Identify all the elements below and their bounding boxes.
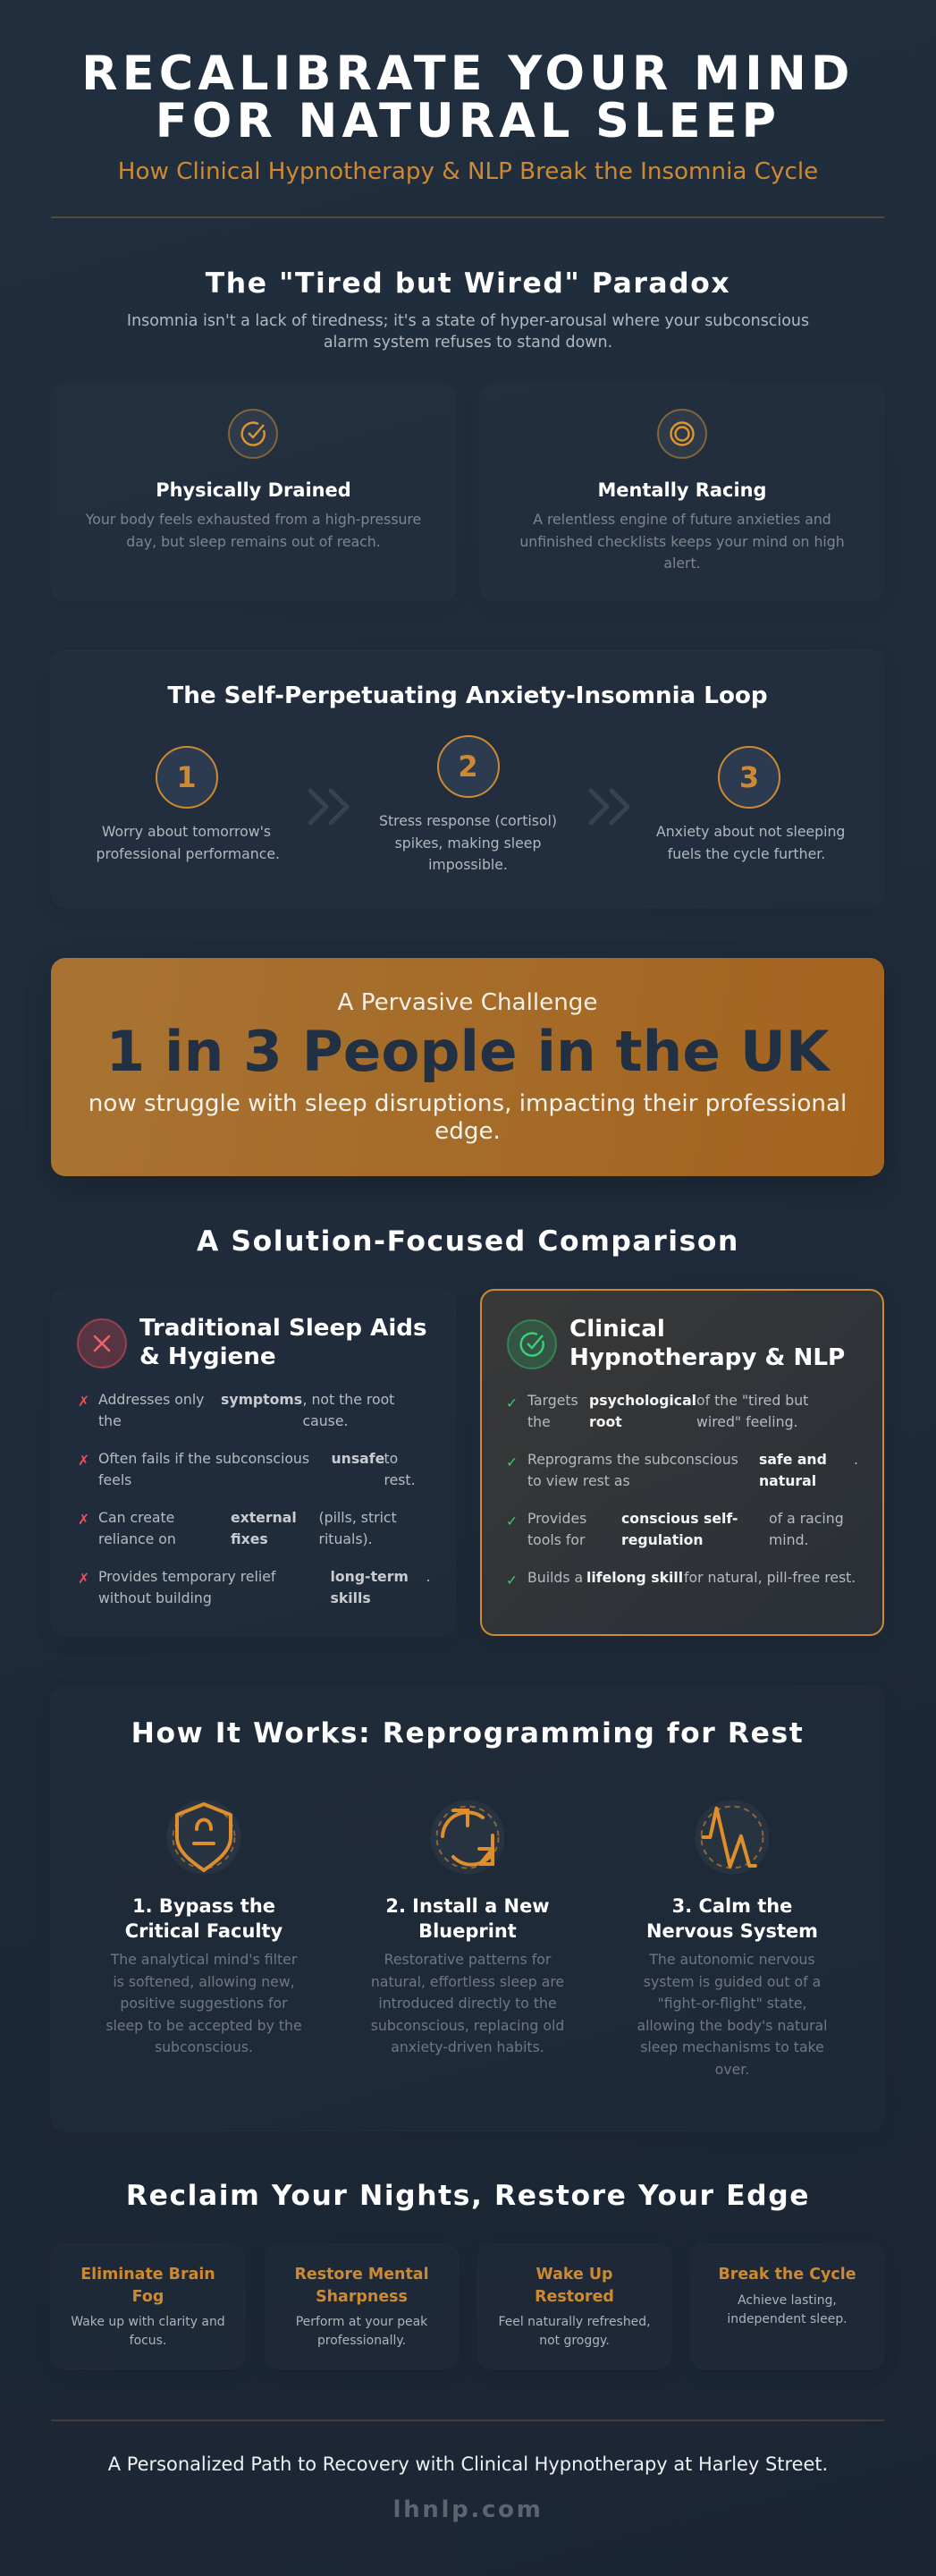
list item 4: Builds a: [527, 1569, 583, 1586]
list item 1: cause.: [302, 1412, 349, 1429]
benefit text: Wake up with clarity and: [71, 2315, 225, 2329]
list item 4: skills: [331, 1589, 371, 1606]
step 1 text: Worry about tomorrow's: [102, 823, 271, 840]
card text: Your body feels exhausted from a high-pressure: [86, 511, 421, 528]
list item 1: of the "tired but: [696, 1392, 808, 1409]
title: [81, 47, 855, 148]
step title: 1. Bypass the: [132, 1895, 275, 1917]
card title: Mentally Racing: [597, 479, 767, 501]
list item 3: tools for: [527, 1531, 585, 1548]
step text: Restorative patterns for: [384, 1951, 551, 1968]
benefit text: [691, 2292, 883, 2329]
list item 3: (pills, strict: [318, 1509, 397, 1526]
step title: [385, 1895, 550, 1942]
step title: 2. Install a New: [385, 1895, 550, 1917]
step text: [371, 1951, 564, 2055]
list item 2: [78, 1450, 416, 1488]
comparison title: [139, 1315, 427, 1370]
list item 2: rest.: [384, 1471, 416, 1488]
list item 2: ✓: [506, 1453, 518, 1470]
step 3: [656, 746, 845, 862]
benefit title: [478, 2264, 670, 2308]
list item 1: Targets: [527, 1392, 578, 1409]
list item 3: rituals).: [318, 1530, 373, 1547]
step title: [646, 1895, 818, 1942]
list item 2: feels: [98, 1471, 131, 1488]
list item 1: [506, 1392, 808, 1430]
card text: [86, 511, 421, 550]
step number 1: 1: [176, 760, 197, 794]
banner label: A Pervasive Challenge: [338, 989, 597, 1016]
benefit text: [266, 2313, 458, 2351]
step title: Nervous System: [646, 1920, 818, 1942]
comparison title: Traditional Sleep Aids: [139, 1315, 427, 1342]
list item 4: ✓: [506, 1572, 518, 1589]
benefit text: professionally.: [317, 2334, 406, 2348]
step text: is softened, allowing new,: [113, 1973, 295, 1989]
step 3 text: [656, 823, 845, 862]
banner text: [89, 1089, 847, 1145]
benefit title: Restore Mental: [294, 2266, 429, 2284]
benefit title: Sharpness: [316, 2288, 408, 2306]
title: FOR NATURAL SLEEP: [156, 94, 780, 148]
step text: [637, 1951, 828, 2077]
step 2 text: impossible.: [428, 856, 508, 873]
title: RECALIBRATE YOUR MIND: [81, 47, 855, 101]
benefit title: Wake Up: [535, 2266, 613, 2284]
list item 1: Addresses only: [98, 1391, 204, 1408]
intro text: [127, 311, 809, 352]
step text: system is guided out of a: [644, 1973, 821, 1989]
list item 3: reliance on: [98, 1530, 176, 1547]
panel: benefit break cycle: [690, 2243, 884, 2369]
list item 2: Reprograms the subconscious: [527, 1451, 738, 1468]
list item 1: the: [98, 1412, 122, 1429]
list item 4: .: [426, 1568, 431, 1585]
footer text: A Personalized Path to Recovery with Clinical Hypnotherapy at Harley Street.: [108, 2453, 828, 2475]
panel: mentally racing: [480, 384, 884, 601]
list item 4: [506, 1569, 856, 1589]
step: calm: [637, 1800, 828, 2077]
step 2 text: Stress response (cortisol): [379, 812, 557, 829]
list item 4: long-term: [331, 1568, 409, 1585]
panel: how it works: [51, 1686, 884, 2131]
loop heading: The Self-Perpetuating Anxiety-Insomnia Loop: [167, 682, 768, 708]
comparison title: Clinical: [569, 1316, 665, 1343]
benefit text: not groggy.: [539, 2334, 610, 2348]
heading: how it works: How It Works: Reprogramming for Rest: [131, 1717, 804, 1750]
icon: shield: [167, 1800, 240, 1875]
intro text: alarm system refuses to stand down.: [324, 334, 612, 352]
list item 1: psychological: [589, 1392, 696, 1409]
comparison title: Hypnotherapy & NLP: [569, 1344, 845, 1371]
card text: alert.: [663, 555, 701, 572]
benefit title: Restored: [535, 2288, 614, 2306]
card text: A relentless engine of future anxieties and: [533, 511, 831, 528]
step number 3: [718, 746, 780, 809]
list item 4: lifelong skill: [586, 1569, 683, 1586]
list item 2: safe and: [759, 1451, 827, 1468]
step: bypass: [105, 1800, 302, 2055]
panel: anxiety-insomnia loop: [51, 650, 884, 908]
step number 2: 2: [458, 750, 478, 784]
list item 3: fixes: [231, 1530, 268, 1547]
step title: [125, 1895, 282, 1942]
step 1: [97, 746, 280, 862]
step title: Critical Faculty: [125, 1920, 282, 1942]
panel: benefit brain fog: [51, 2243, 245, 2369]
list item 3: mind.: [769, 1531, 809, 1548]
panel: clinical hypnotherapy: [480, 1289, 884, 1636]
benefit text: [52, 2313, 244, 2351]
benefit title: [266, 2264, 458, 2308]
step: install: [371, 1800, 564, 2055]
step text: anxiety-driven habits.: [391, 2038, 544, 2055]
card text: day, but sleep remains out of reach.: [126, 533, 381, 550]
list item 4: ✗: [78, 1570, 89, 1587]
step text: sleep to be accepted by the: [105, 2016, 302, 2034]
list item 2: unsafe: [331, 1450, 384, 1467]
step 3 text: fuels the cycle further.: [668, 845, 825, 862]
list item 1: the: [527, 1413, 551, 1430]
panel: physically drained: [51, 384, 456, 601]
card title: Physically Drained: [156, 479, 351, 501]
list item 2: ✗: [78, 1452, 89, 1469]
intro text: Insomnia isn't a lack of tiredness; it's a state of hyper-arousal where your subconscious: [127, 311, 809, 329]
arrow 2: [588, 789, 629, 825]
benefit text: Perform at your peak: [296, 2315, 427, 2329]
heading: comparison: A Solution-Focused Comparison: [197, 1225, 739, 1258]
list item 1: , not the root: [302, 1391, 394, 1408]
banner text: edge.: [434, 1118, 501, 1145]
step 1 text: [97, 823, 280, 862]
panel: traditional sleep aids: [51, 1289, 456, 1636]
benefit text: focus.: [130, 2334, 166, 2348]
panel: benefit wake up: [477, 2243, 671, 2369]
statistic: 1 in 3 People in the UK: [105, 1019, 830, 1084]
list item 4: [78, 1568, 431, 1606]
step 1 text: professional performance.: [97, 845, 280, 862]
footer brand: lhnlp.com: [393, 2496, 543, 2523]
list item 1: symptoms: [221, 1391, 302, 1408]
step number 3: 3: [739, 760, 759, 794]
step text: sleep mechanisms to take: [640, 2038, 824, 2055]
step text: natural, effortless sleep are: [371, 1973, 564, 1989]
panel: benefit sharpness: [265, 2243, 459, 2369]
list item 2: .: [854, 1451, 858, 1468]
step text: subconscious.: [155, 2038, 253, 2055]
icon: concentric rings: [657, 409, 707, 459]
list item 2: to: [384, 1450, 398, 1467]
banner text: now struggle with sleep disruptions, impacting their professional: [89, 1089, 847, 1116]
comparison title: & Hygiene: [139, 1343, 276, 1370]
list item 3: of a racing: [769, 1510, 844, 1527]
step number 1: [156, 746, 218, 809]
list item 2: to view rest as: [527, 1472, 630, 1489]
step text: over.: [715, 2061, 749, 2077]
subtitle: How Clinical Hypnotherapy & NLP Break the Insomnia Cycle: [118, 157, 818, 184]
step text: positive suggestions for: [120, 1995, 288, 2012]
arrow 1: [308, 789, 349, 825]
list item 3: ✗: [78, 1511, 89, 1528]
list item 2: [506, 1451, 858, 1489]
step 2: [379, 735, 557, 873]
step text: [105, 1951, 302, 2055]
list item 4: for natural, pill-free rest.: [684, 1569, 856, 1586]
benefit title: Eliminate Brain: [80, 2266, 215, 2284]
list item 3: ✓: [506, 1513, 518, 1530]
list item 3: conscious self-: [621, 1510, 738, 1527]
step title: Blueprint: [418, 1920, 517, 1942]
benefit text: independent sleep.: [727, 2312, 847, 2326]
list item 4: Provides temporary relief: [98, 1568, 275, 1585]
icon: refresh cycle: [431, 1800, 504, 1875]
benefit title: [80, 2266, 215, 2306]
list item 1: [78, 1391, 394, 1429]
icon: pulse: [696, 1800, 769, 1875]
benefit title: Fog: [132, 2288, 164, 2306]
step 2 text: spikes, making sleep: [395, 835, 541, 852]
list item 3: [506, 1510, 844, 1548]
step 2 text: [379, 812, 557, 873]
step text: The analytical mind's filter: [111, 1951, 297, 1968]
icon: check circle: [228, 409, 278, 459]
step number 2: [436, 735, 499, 798]
step text: allowing the body's natural: [637, 2016, 828, 2034]
step text: introduced directly to the: [378, 1995, 557, 2012]
heading: benefits: Reclaim Your Nights, Restore Your Edge: [126, 2179, 810, 2211]
benefit title: Break the Cycle: [718, 2266, 856, 2284]
list item 3: Can create: [98, 1509, 174, 1526]
benefit text: Achieve lasting,: [738, 2293, 837, 2308]
step 3 text: Anxiety about not sleeping: [656, 823, 845, 840]
card text: unfinished checklists keeps your mind on high: [519, 533, 845, 550]
step title: 3. Calm the: [672, 1895, 792, 1917]
list item 3: Provides: [527, 1510, 586, 1527]
comparison title: [569, 1316, 845, 1371]
list item 3: [78, 1509, 397, 1547]
benefit text: Feel naturally refreshed,: [498, 2315, 651, 2329]
heading: paradox: The "Tired but Wired" Paradox: [206, 267, 730, 299]
list item 3: regulation: [621, 1531, 704, 1548]
icon: green check: [507, 1319, 557, 1369]
list item 4: without building: [98, 1589, 212, 1606]
card text: [519, 511, 845, 572]
list item 2: natural: [759, 1472, 816, 1489]
list item 1: wired" feeling.: [696, 1413, 798, 1430]
list item 3: external: [231, 1509, 297, 1526]
list item 1: ✓: [506, 1394, 518, 1411]
benefit text: [478, 2313, 670, 2351]
step text: "fight-or-flight" state,: [657, 1995, 807, 2012]
list item 2: Often fails if the subconscious: [98, 1450, 309, 1467]
callout: statistic banner: [51, 958, 884, 1176]
step text: The autonomic nervous: [649, 1951, 815, 1968]
list item 1: root: [589, 1413, 622, 1430]
step text: subconscious, replacing old: [371, 2016, 564, 2034]
list item 1: ✗: [78, 1393, 89, 1410]
icon: red cross: [77, 1318, 127, 1368]
